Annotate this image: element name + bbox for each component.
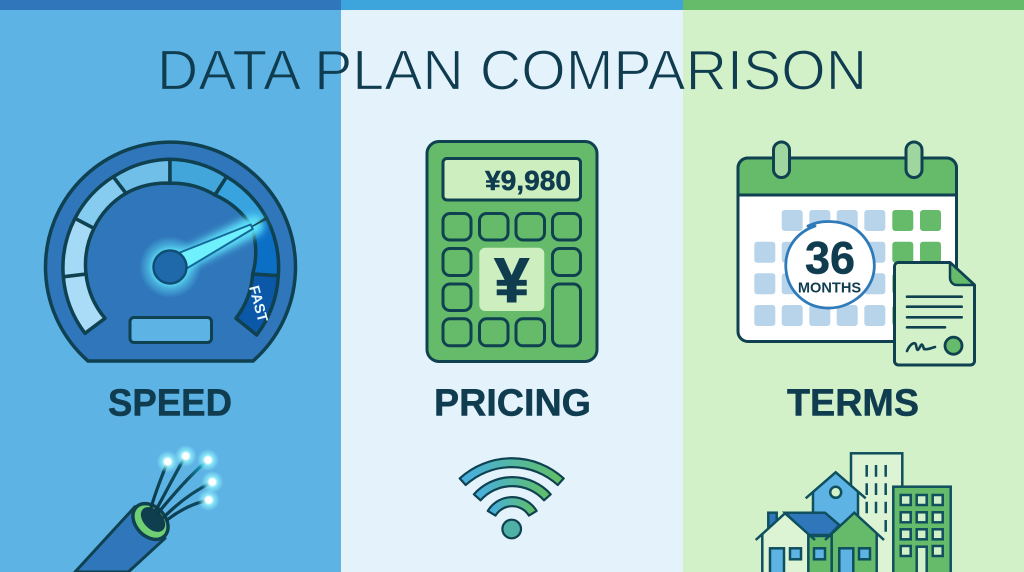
white house xyxy=(756,513,815,572)
wifi dot xyxy=(502,520,521,538)
panel: pricing background xyxy=(341,0,683,572)
fiber tips xyxy=(157,445,223,511)
title: DATA PLAN COMPARISON xyxy=(157,38,867,102)
hand-drawn circle xyxy=(786,222,874,308)
gauge readout box xyxy=(130,318,212,342)
middle green section xyxy=(808,536,832,572)
blue house xyxy=(806,472,866,545)
cable end xyxy=(123,494,178,549)
icon: calendar and contract xyxy=(738,142,974,365)
blue roof xyxy=(785,513,839,535)
yen symbol: ¥ xyxy=(495,246,530,316)
calculator body xyxy=(427,142,597,362)
gauge segments xyxy=(63,159,279,335)
calendar rings xyxy=(774,142,922,178)
calendar header xyxy=(738,158,956,195)
display value: ¥9,980 xyxy=(485,165,571,196)
label: terms: TERMS xyxy=(787,382,919,424)
icon: fiber optic cable xyxy=(75,445,223,572)
gauge label: fast: FAST xyxy=(245,284,270,324)
yen key xyxy=(479,248,544,311)
wifi outer arc xyxy=(460,458,564,485)
icon: wifi signal xyxy=(460,458,564,538)
tall building xyxy=(851,453,902,572)
hub glow xyxy=(139,236,201,298)
panel: speed background xyxy=(0,0,341,572)
needle glow xyxy=(172,226,254,266)
calculator display xyxy=(443,158,580,200)
cable core xyxy=(136,502,170,537)
contract document xyxy=(894,262,974,365)
fiber strands xyxy=(151,456,212,520)
label: pricing: PRICING xyxy=(434,382,591,424)
contract length number: 36 xyxy=(805,232,855,284)
green apartment building xyxy=(893,487,951,572)
top bar: terms xyxy=(683,0,1024,10)
panel: terms background xyxy=(683,0,1024,572)
icon: speedometer gauge xyxy=(46,142,296,361)
top bar: speed xyxy=(0,0,341,10)
calendar page xyxy=(738,158,956,342)
gauge body xyxy=(46,142,296,361)
top bar: pricing xyxy=(341,0,683,10)
needle xyxy=(180,218,267,268)
green house xyxy=(825,513,884,572)
contract length unit: MONTHS xyxy=(798,280,861,296)
cable sheath xyxy=(75,507,165,572)
cable ring xyxy=(128,499,173,544)
label: speed: SPEED xyxy=(108,382,232,424)
icon: calculator xyxy=(427,142,597,362)
calendar highlighted cells xyxy=(892,210,941,326)
calculator buttons xyxy=(443,214,580,346)
wifi middle arc xyxy=(474,477,551,500)
icon: buildings and houses xyxy=(756,453,951,572)
calendar cells xyxy=(754,210,885,326)
chimney xyxy=(768,513,777,527)
wifi inner arc xyxy=(488,497,537,516)
needle hub xyxy=(154,250,186,284)
